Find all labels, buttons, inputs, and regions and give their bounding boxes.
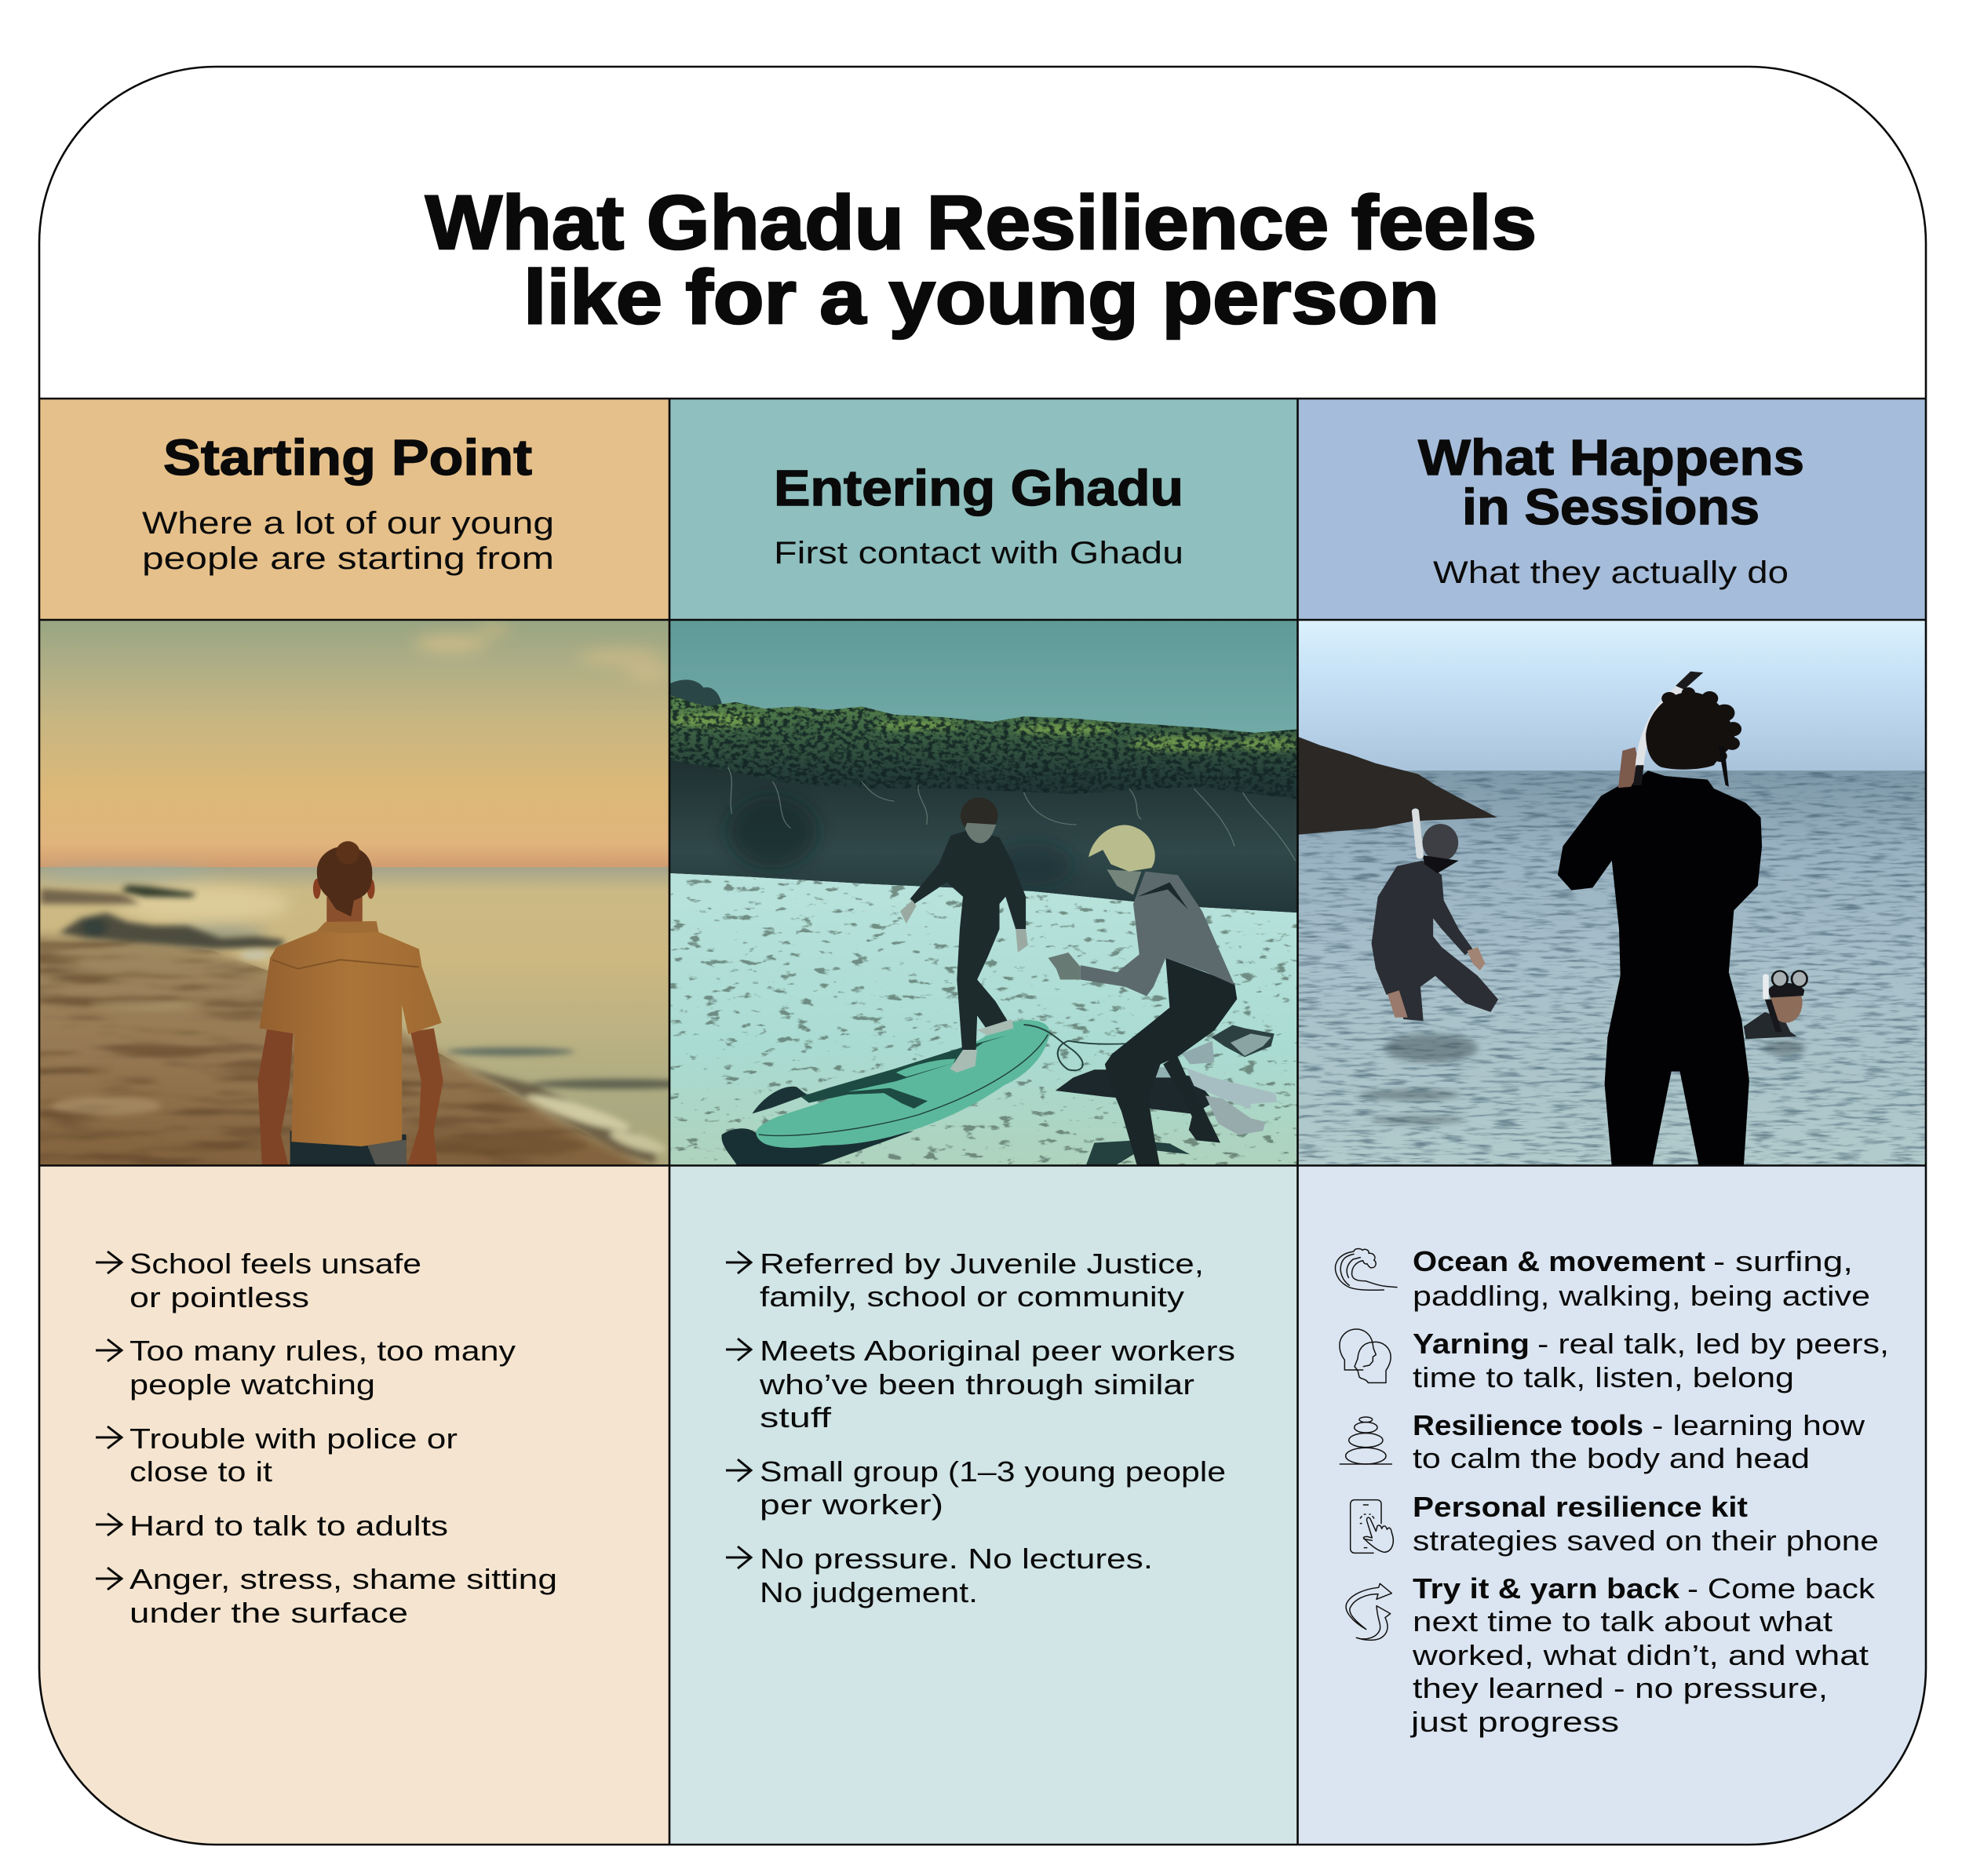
item: try it and yarn back: just progress (1410, 1706, 1619, 1738)
title (425, 180, 1537, 340)
heading panel: starting point: people are starting from (142, 541, 554, 576)
list with icons: what happens in sessions (1298, 1166, 1927, 1845)
bullet list: starting point: Hard to talk to adults (129, 1510, 448, 1542)
item: try it and yarn back: they learned - no pressure, (1413, 1672, 1828, 1704)
icon: stacked stones (1340, 1417, 1391, 1464)
panel: what happens in sessions (1297, 399, 1927, 1845)
heading panel: what happens in sessions: What Happens (1418, 429, 1804, 486)
item: resilience tools: - learning how (1652, 1409, 1865, 1441)
item: ocean and movement: paddling, walking, being active (1413, 1280, 1870, 1312)
item: yarning: Yarning (1413, 1328, 1530, 1360)
heading panel: entering ghadu (669, 399, 1298, 620)
bullet list: entering ghadu: who’ve been through similar (759, 1368, 1194, 1401)
bullet list: entering ghadu (669, 1166, 1298, 1845)
heading panel: what happens in sessions: What they actually do (1433, 556, 1789, 590)
item: resilience tools: to calm the body and head (1413, 1442, 1810, 1474)
bullet list: starting point: or pointless (129, 1281, 309, 1313)
instructor (1048, 825, 1237, 1169)
heading panel: starting point: Where a lot of our young (142, 506, 554, 541)
item: try it and yarn back: - Come back (1687, 1572, 1876, 1605)
panel: entering ghadu (667, 399, 1300, 1845)
item: ocean and movement (1413, 1245, 1870, 1312)
person swimming (1744, 971, 1807, 1039)
bullet list: entering ghadu: No pressure. No lectures. (760, 1543, 1153, 1575)
leash (1024, 1025, 1125, 1070)
person wading (1372, 808, 1498, 1021)
person from behind (1558, 672, 1762, 1167)
heading panel: starting point (39, 399, 669, 620)
bullet list: entering ghadu: per worker) (760, 1488, 943, 1521)
bullet list: entering ghadu: Referred by Juvenile Justice, (760, 1248, 1204, 1280)
item: yarning (1413, 1328, 1889, 1393)
title: like for a young person (523, 254, 1439, 340)
rock (1297, 736, 1497, 835)
photo: surf lesson on beach (667, 612, 1300, 1169)
icon: two heads yarning (1340, 1329, 1391, 1382)
heading panel: what happens in sessions: in Sessions (1462, 479, 1760, 535)
bullet list: entering ghadu: Meets Aboriginal peer workers (760, 1335, 1235, 1367)
bullet list: entering ghadu: family, school or community (760, 1280, 1184, 1313)
man's arms (257, 1028, 294, 1165)
boy's shadow on board (800, 1036, 1007, 1109)
bullet list: starting point (39, 1166, 669, 1845)
item: try it and yarn back (1410, 1572, 1876, 1738)
item: personal resilience kit (1413, 1491, 1879, 1557)
item: try it and yarn back: Try it & yarn back (1413, 1572, 1680, 1605)
bullet list: starting point: under the surface (129, 1597, 408, 1629)
item: try it and yarn back: worked, what didn’t, and what (1412, 1639, 1869, 1671)
boy (900, 798, 1028, 1073)
panel: starting point (26, 399, 702, 1845)
board shadow on sand (721, 1128, 914, 1167)
heading panel: what happens in sessions (1298, 399, 1927, 620)
bullet list: entering ghadu: Small group (1–3 young people (760, 1455, 1226, 1488)
item: resilience tools: Resilience tools (1413, 1409, 1643, 1441)
bullet list: starting point: people watching (129, 1368, 375, 1401)
bullet list: entering ghadu: stuff (760, 1401, 832, 1433)
heading panel: starting point: Starting Point (163, 429, 532, 486)
bullet list: starting point: Anger, stress, shame sitting (129, 1563, 557, 1595)
photo: snorkelling in the ocean (1297, 612, 1927, 1167)
hanging roots (728, 767, 1296, 861)
item: yarning: time to talk, listen, belong (1413, 1361, 1794, 1393)
bullet list: entering ghadu: No judgement. (760, 1576, 978, 1608)
item: yarning: - real talk, led by peers, (1537, 1328, 1889, 1360)
bullet list: starting point: Too many rules, too many (129, 1335, 516, 1367)
bullet list: starting point: close to it (129, 1455, 272, 1488)
icon: phone with tapping hand (1351, 1500, 1393, 1553)
item: personal resilience kit: strategies saved on their phone (1413, 1524, 1879, 1557)
bullet list: starting point: School feels unsafe (129, 1248, 421, 1280)
surfboard (756, 1020, 1049, 1148)
item: resilience tools (1413, 1409, 1865, 1474)
title: What Ghadu Resilience feels (425, 180, 1537, 265)
bullet list: starting point: Trouble with police or (129, 1422, 458, 1455)
clothes pile (1056, 1069, 1214, 1114)
item: personal resilience kit: Personal resilience kit (1413, 1491, 1748, 1523)
heading panel: entering ghadu: First contact with Ghadu (774, 536, 1183, 570)
item: ocean and movement: - surfing, (1713, 1245, 1853, 1277)
item: ocean and movement: Ocean & movement (1413, 1245, 1705, 1277)
item: try it and yarn back: next time to talk about what (1413, 1605, 1833, 1637)
photo: man on beach at sunset (40, 621, 669, 1164)
icon: ocean wave (1336, 1249, 1397, 1290)
reflections (1358, 1033, 1805, 1124)
icon: circular arrows (1346, 1583, 1391, 1640)
heading panel: entering ghadu: Entering Ghadu (774, 460, 1183, 516)
